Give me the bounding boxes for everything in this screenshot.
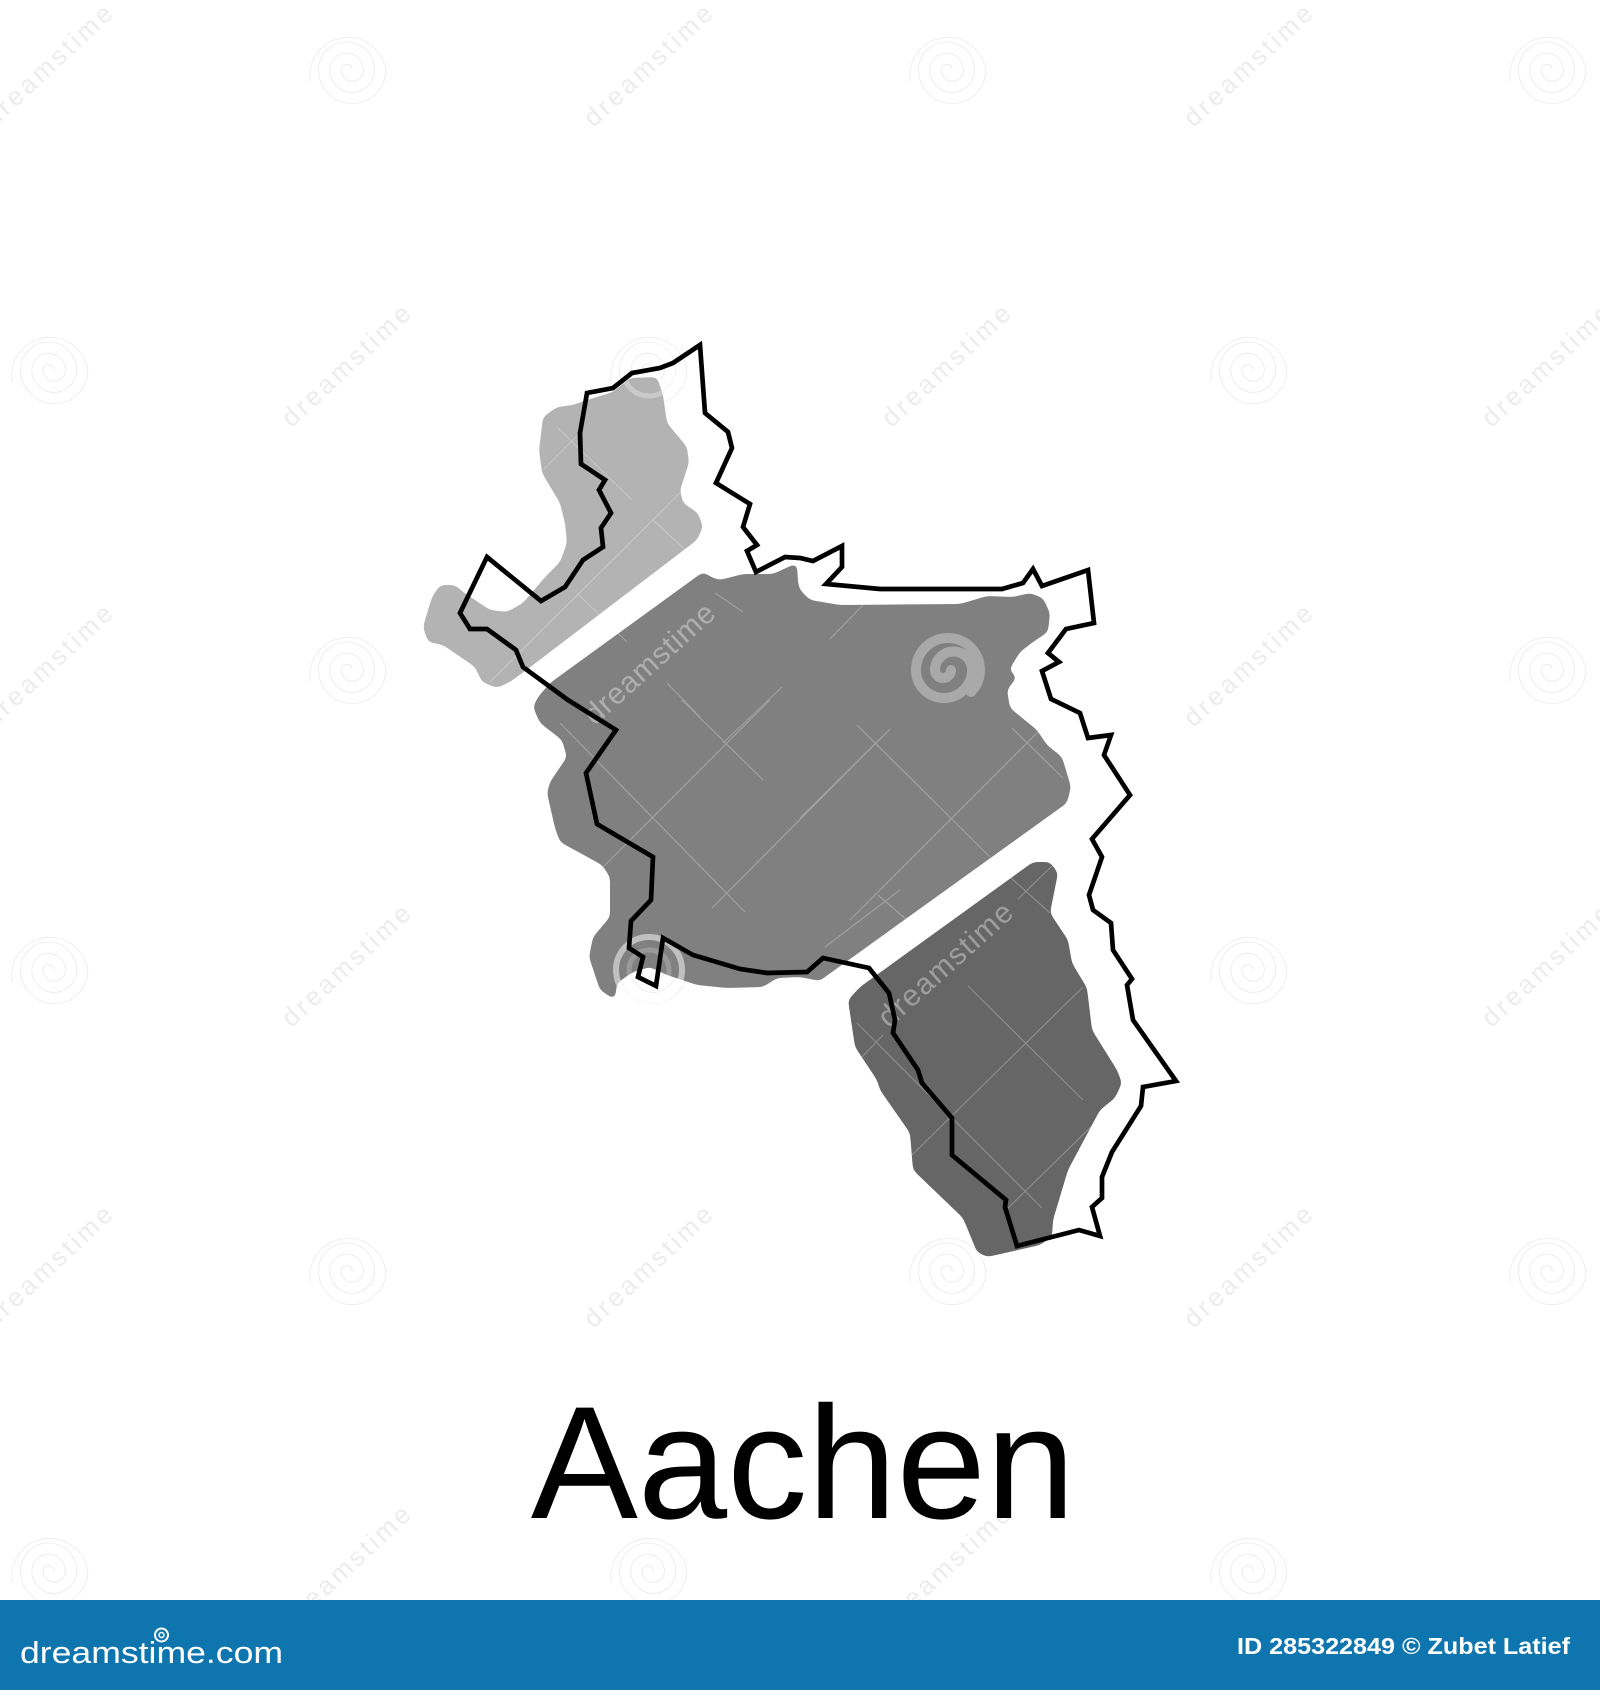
- watermark layer on white background: dreamstime: [1177, 1199, 1318, 1334]
- watermark layer on white background: dreamstime: [1177, 598, 1318, 733]
- map region: dark grey south: [848, 862, 1122, 1257]
- watermark layer on white background: dreamstime: [275, 298, 416, 433]
- watermark layer on white background: dreamstime: [875, 1499, 1016, 1634]
- title: Aachen: [531, 1374, 1075, 1553]
- map region: mid grey centre: [533, 563, 1071, 1000]
- watermark layer on white background: dreamstime: [577, 1199, 718, 1334]
- watermark layer on white background: dreamstime: [275, 1499, 416, 1634]
- watermark layer on white background: dreamstime: [875, 298, 1016, 433]
- map outline: [460, 345, 1176, 1246]
- watermark overlay on map: [490, 344, 1098, 1208]
- watermark overlay on map: dreamstime: [871, 896, 1020, 1034]
- watermark layer on white background: dreamstime: [1177, 0, 1318, 133]
- watermark layer on white background: dreamstime: [275, 898, 416, 1033]
- footer logo spiral icon: [155, 1628, 168, 1642]
- footer logo text: dreamstime.com: [20, 1635, 283, 1670]
- footer credit: ID 285322849 © Zubet Latief: [1237, 1633, 1570, 1659]
- footer bar: [0, 1600, 1600, 1690]
- watermark overlay on map: dreamstime: [577, 596, 722, 731]
- map region: light grey north: [423, 377, 703, 688]
- watermark layer on white background: dreamstime: [577, 0, 718, 133]
